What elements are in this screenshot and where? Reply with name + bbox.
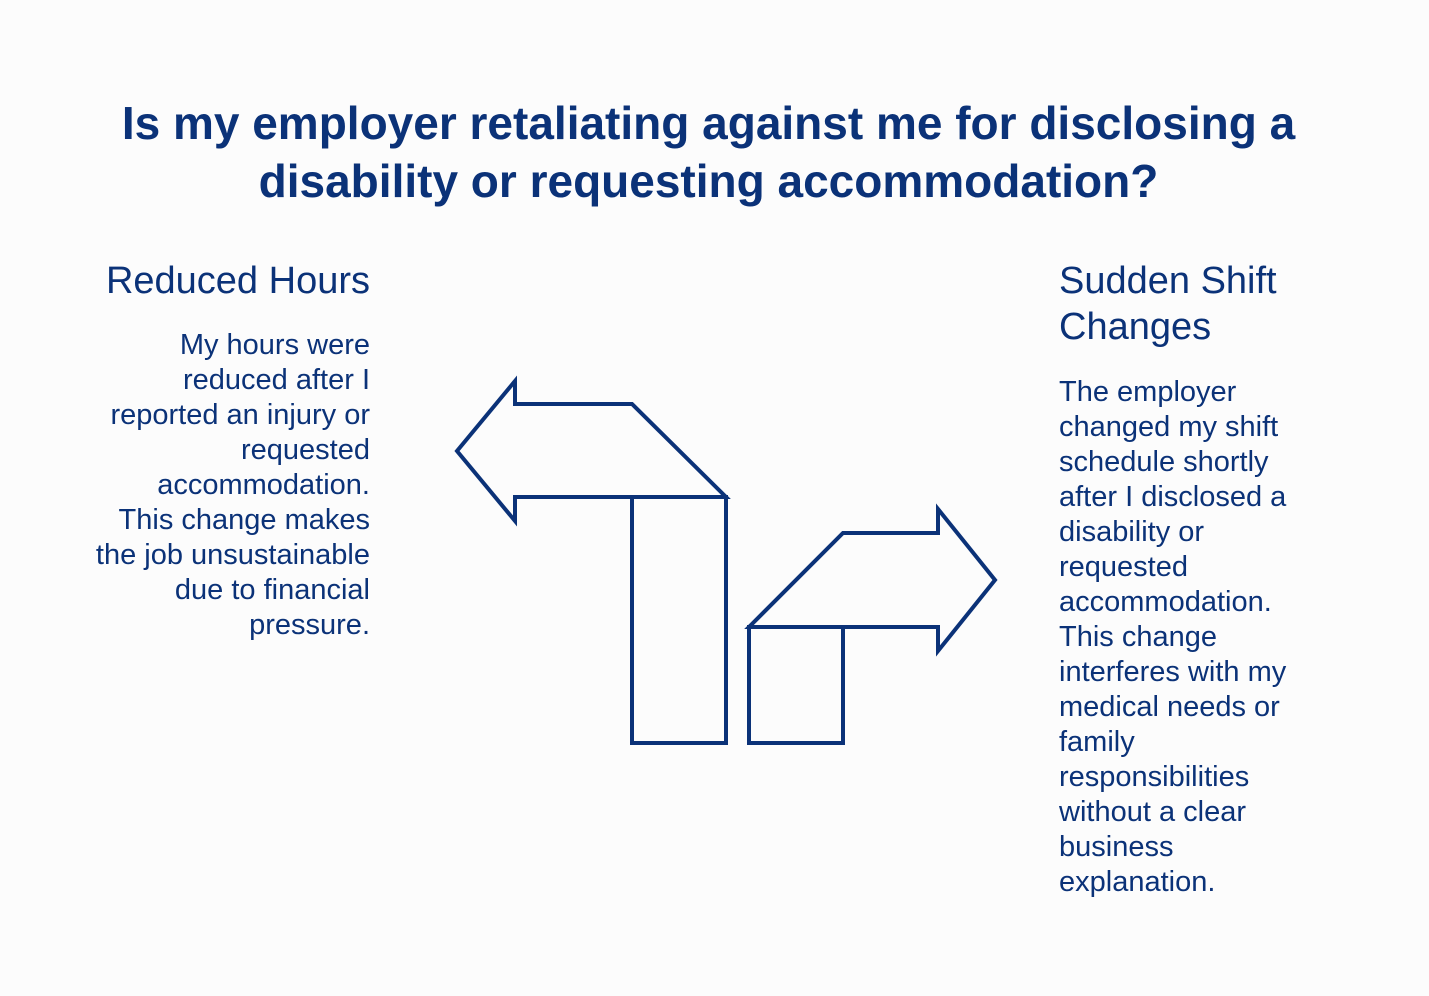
heading: reduced hours: Reduced Hours <box>106 260 370 302</box>
text: sudden shift changes: changed my shift <box>1059 411 1278 443</box>
text: reduced hours: This change makes <box>119 504 370 536</box>
text: sudden shift changes: medical needs or <box>1059 691 1280 723</box>
arrow: left <box>457 381 726 743</box>
title: disability or requesting accommodation? <box>259 155 1158 207</box>
heading: sudden shift changes <box>1059 260 1277 348</box>
heading: sudden shift changes: Changes <box>1059 306 1211 348</box>
text: sudden shift changes <box>1059 376 1286 898</box>
panel: sudden shift changes <box>1059 260 1286 898</box>
text: sudden shift changes: without a clear <box>1059 796 1246 828</box>
heading: sudden shift changes: Sudden Shift <box>1059 260 1277 302</box>
text: sudden shift changes: schedule shortly <box>1059 446 1269 478</box>
text: sudden shift changes: interferes with my <box>1059 656 1286 688</box>
text: reduced hours: pressure. <box>249 609 370 641</box>
text: sudden shift changes: business <box>1059 831 1173 863</box>
text: sudden shift changes: accommodation. <box>1059 586 1272 618</box>
text: reduced hours: requested <box>241 434 370 466</box>
text: sudden shift changes: after I disclosed a <box>1059 481 1286 513</box>
text: sudden shift changes: This change <box>1059 621 1217 653</box>
text: sudden shift changes: The employer <box>1059 376 1236 408</box>
text: sudden shift changes: requested <box>1059 551 1188 583</box>
text: reduced hours: reduced after I <box>183 364 370 396</box>
text: sudden shift changes: responsibilities <box>1059 761 1249 793</box>
text: sudden shift changes: explanation. <box>1059 866 1215 898</box>
text: reduced hours: accommodation. <box>157 469 370 501</box>
arrow: right <box>749 509 995 743</box>
text: reduced hours: due to financial <box>175 574 370 606</box>
text: reduced hours: My hours were <box>180 329 370 361</box>
title <box>122 97 1296 207</box>
text: reduced hours: reported an injury or <box>110 399 370 431</box>
text: sudden shift changes: disability or <box>1059 516 1204 548</box>
panel: reduced hours <box>96 260 370 641</box>
text: sudden shift changes: family <box>1059 726 1135 758</box>
title: Is my employer retaliating against me for disclosing a <box>122 97 1295 149</box>
text: reduced hours <box>96 329 370 641</box>
text: reduced hours: the job unsustainable <box>96 539 370 571</box>
